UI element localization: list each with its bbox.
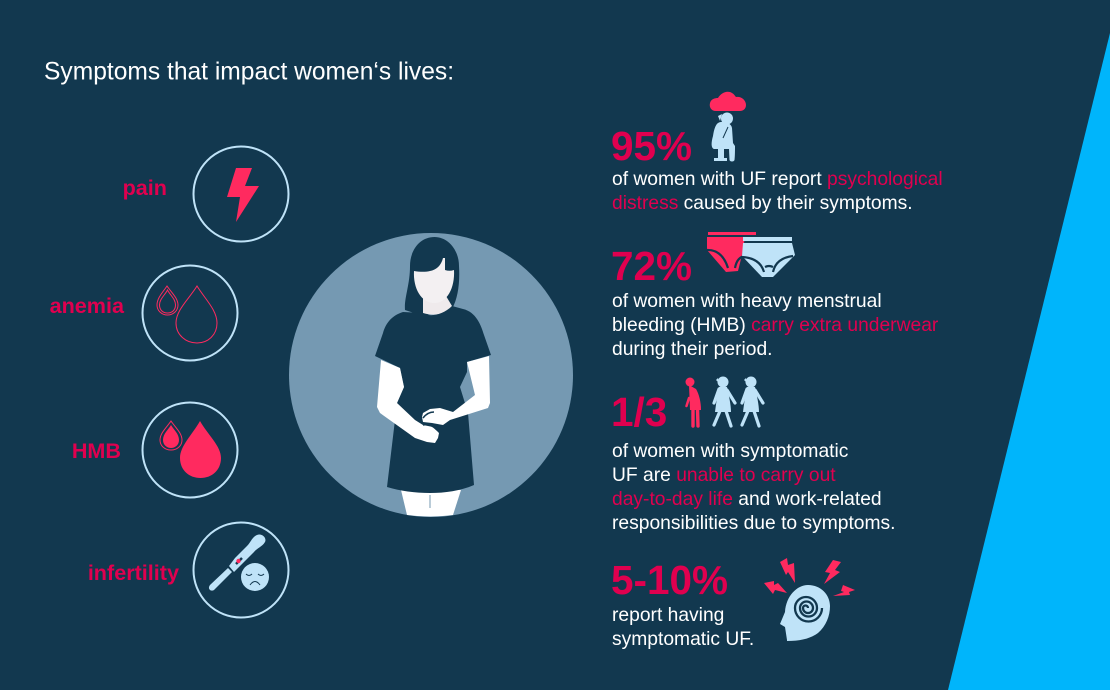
icon: outline drops	[157, 286, 217, 343]
number: 95%	[611, 123, 692, 169]
text: during their period.	[612, 339, 773, 360]
dress	[375, 306, 491, 493]
blue woman 2	[742, 376, 763, 426]
stat: 1/3	[611, 376, 896, 534]
text: unable to carry out	[676, 465, 836, 486]
label: pain: pain	[123, 175, 167, 200]
neck and face	[414, 258, 454, 315]
icon: ring	[194, 146, 288, 242]
fingers	[423, 412, 437, 430]
pink woman	[686, 378, 701, 426]
icon: ring	[142, 266, 238, 360]
icon: lightning bolt	[227, 168, 259, 222]
icon: woman under cloud	[710, 92, 746, 162]
legs	[401, 490, 461, 516]
text: symptomatic UF.	[612, 629, 754, 650]
text: of women with heavy menstrual	[612, 291, 882, 312]
right arm	[422, 356, 490, 425]
left arm	[377, 360, 439, 443]
number: 5-10%	[611, 557, 728, 603]
text: and work-related	[733, 489, 882, 510]
symptom: pain	[123, 146, 288, 242]
text: carry extra underwear	[751, 315, 939, 336]
text: psychological	[827, 169, 943, 190]
icon: ring	[194, 522, 288, 618]
label: anemia: anemia	[50, 293, 125, 318]
text: day-to-day life	[612, 489, 733, 510]
text: of women with UF report	[612, 169, 827, 190]
text: of women with symptomatic	[612, 441, 849, 462]
icon: sad face	[241, 563, 269, 591]
cyan corner wedge	[948, 33, 1110, 690]
icon: three women	[686, 376, 763, 426]
text: distress	[612, 193, 678, 214]
text: bleeding (HMB)	[612, 315, 751, 336]
icon: small drop	[160, 421, 182, 450]
hair	[405, 237, 459, 316]
stat: 95%	[611, 92, 943, 214]
icon: test stick	[209, 535, 265, 591]
number: 1/3	[611, 389, 667, 435]
text: report having	[612, 605, 724, 626]
label: HMB: HMB	[72, 438, 121, 463]
icon: head with spiral and bolts	[764, 558, 855, 641]
stat: 5-10%	[611, 557, 855, 650]
number: 72%	[611, 243, 692, 289]
label: infertility: infertility	[88, 560, 179, 585]
symptom: infertility	[88, 522, 288, 618]
icon: filled drop	[180, 421, 221, 478]
stat: 72%	[611, 232, 939, 360]
icon: underwear	[706, 232, 795, 277]
symptom: HMB	[72, 402, 238, 498]
text: responsibilities due to symptoms.	[612, 513, 896, 534]
symptom: anemia	[50, 266, 238, 360]
blue woman 1	[714, 376, 735, 426]
title: Symptoms that impact women‘s lives:	[44, 58, 454, 86]
text: UF are	[612, 465, 676, 486]
text: caused by their symptoms.	[678, 193, 913, 214]
icon: ring	[142, 402, 238, 498]
background circle	[289, 233, 573, 517]
central figure panel	[289, 233, 573, 517]
